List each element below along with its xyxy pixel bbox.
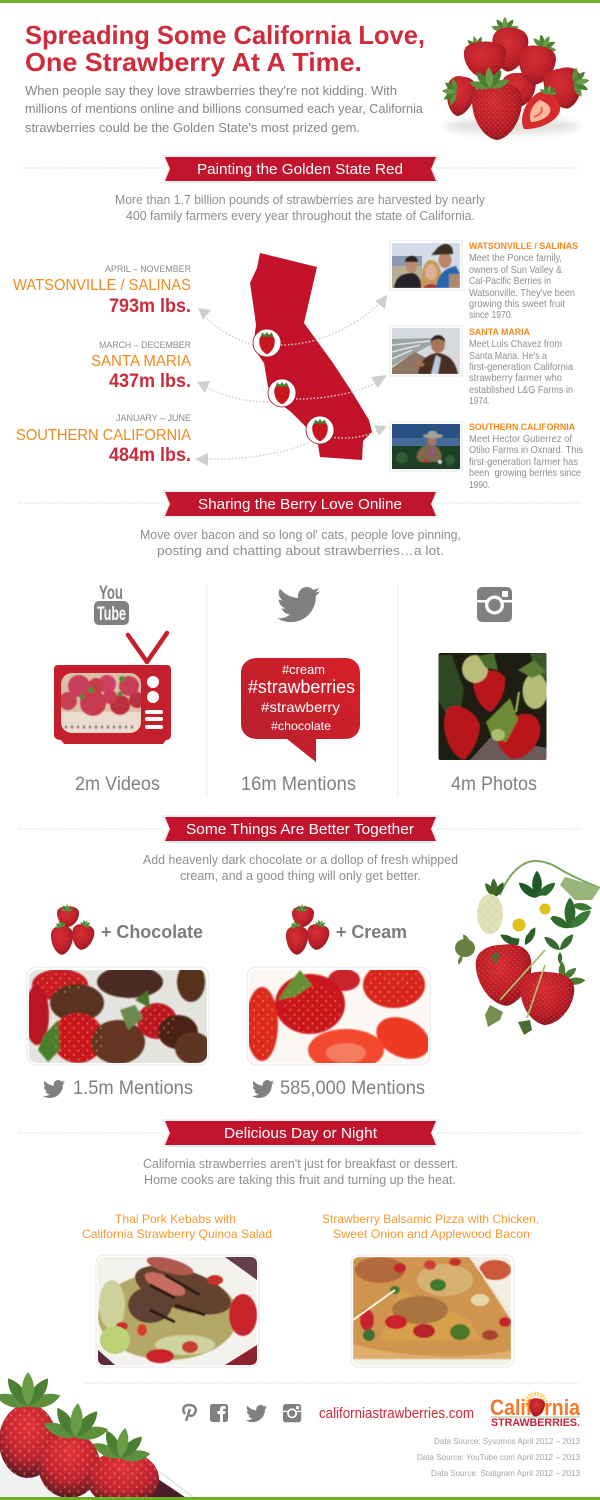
icon: YouTube: You [99, 583, 123, 604]
section 3 intro [143, 853, 458, 883]
left label: Watsonville / Salinas [13, 264, 191, 317]
section 4 intro: Home cooks are taking this fruit and turning up the heat. [144, 1173, 456, 1187]
recipe title: pizza [322, 1212, 539, 1241]
section 1 intro [115, 193, 486, 223]
pairing: cream heading [286, 904, 407, 955]
farmer text: Santa Maria: 1974. [469, 395, 490, 407]
section divider 1 [19, 167, 582, 169]
intro text: When people say they love strawberries they're not kidding. With [25, 83, 397, 98]
TV with strawberries [54, 633, 171, 744]
icon: YouTube: Tube [97, 604, 126, 625]
section 4 intro: California strawberries aren't just for breakfast or dessert. [143, 1157, 458, 1171]
icon: Twitter bird [277, 587, 320, 622]
left label: Southern California [16, 413, 191, 466]
section 1 intro: More than 1.7 billion pounds of strawberries are harvested by nearly [115, 193, 486, 207]
left label: Southern California: JANUARY – JUNE [116, 413, 191, 424]
icon: Instagram [477, 587, 512, 622]
farmer text: Southern California: Meet Hector Gutierrez of [469, 433, 572, 445]
left label: Southern California: 484m lbs. [109, 445, 191, 466]
farmer text: Santa Maria: Santa Maria. He's a [469, 350, 547, 362]
farmer text: Watsonville: WATSONVILLE / SALINAS [469, 241, 578, 252]
bottom green bar [0, 1497, 600, 1500]
section 3 intro: Add heavenly dark chocolate or a dollop of fresh whipped [143, 853, 458, 867]
icon: Pinterest [183, 1405, 196, 1421]
farmer text: Southern California: SOUTHERN CALIFORNIA [469, 422, 575, 433]
logo: California Strawberries: STRAWBERRIES. [491, 1417, 580, 1429]
banner: Delicious Day or Night: Delicious Day or Night [224, 1126, 377, 1142]
banner: Sharing the Berry Love Online [162, 490, 439, 518]
farmer text: Southern California: 1990. [469, 479, 490, 491]
data sources: Data Source: Sysomos April 2012 – 2013 [434, 1436, 580, 1446]
recipe title: pizza: Strawberry Balsamic Pizza with Chicken, [322, 1212, 539, 1226]
hero strawberries photo [441, 17, 592, 140]
banner: Some Things Are Better Together [162, 815, 439, 843]
speech bubble with hashtags: #chocolate [271, 719, 331, 733]
website url: californiastrawberries.com [319, 1406, 474, 1422]
pairing: chocolate heading: + Chocolate [101, 922, 203, 942]
photo: pizza [351, 1255, 514, 1367]
speech bubble with hashtags [241, 658, 360, 762]
logo: California Strawberries [490, 1394, 581, 1429]
stat: 2m Videos: 2m Videos [75, 774, 160, 795]
photo: strawberries and cream [246, 966, 430, 1066]
farmer text: Santa Maria: strawberry farmer who [469, 372, 562, 384]
intro text [25, 83, 424, 135]
recipe title: kebabs [82, 1212, 272, 1241]
icon: YouTube [94, 583, 129, 625]
stat: 16m Mentions: 16m Mentions [241, 774, 356, 795]
farmer text: Watsonville: Cal-Pacific Berries in [469, 275, 551, 287]
section 3 intro: cream, and a good thing will only get better. [180, 869, 421, 883]
farmer text: Southern California [469, 422, 583, 491]
farmer text: Watsonville: since 1970. [469, 309, 513, 321]
farmer text: Santa Maria: established L&G Farms in [469, 384, 573, 396]
speech bubble with hashtags: #strawberries [248, 677, 355, 697]
farmer text: Watsonville: growing this sweet fruit [469, 298, 565, 310]
arrows from pins to labels [202, 300, 383, 459]
pin: Santa Maria [268, 379, 296, 407]
section 4 intro [143, 1157, 458, 1187]
farmer text: Santa Maria: SANTA MARIA [469, 327, 530, 338]
data sources: Data Source: Statigram April 2012 – 2013 [431, 1468, 580, 1478]
photo: chocolate strawberries [25, 962, 211, 1065]
pin: Watsonville [253, 329, 281, 357]
stat: chocolate mentions: 1.5m Mentions [73, 1078, 193, 1099]
speech bubble with hashtags: #cream [282, 663, 325, 677]
pin: Southern California [306, 416, 334, 444]
farmer text: Watsonville: Meet the Ponce family, [469, 252, 562, 264]
banner: Sharing the Berry Love Online: Sharing the Berry Love Online [198, 497, 402, 513]
pairing: chocolate heading [51, 904, 203, 955]
stat: cream mentions: 585,000 Mentions [280, 1078, 425, 1099]
recipe title: pizza: Sweet Onion and Applewood Bacon [333, 1227, 530, 1241]
data sources [417, 1436, 580, 1478]
section 2 intro: Move over bacon and so long ol' cats, people love pinning, [140, 528, 461, 542]
recipe title: kebabs: California Strawberry Quinoa Salad [82, 1227, 272, 1241]
pairing: cream heading: + Cream [336, 922, 407, 942]
map of California [250, 253, 372, 460]
farmer text: Watsonville: Watsonville. They've been [469, 287, 575, 299]
farmer text: Southern California: been growing berries since [469, 467, 581, 479]
banner: Painting the Golden State Red [162, 155, 439, 183]
farmer text: Southern California: Otilio Farms in Oxnard. This [469, 444, 583, 456]
icon: Twitter [246, 1405, 267, 1422]
title [25, 20, 425, 77]
left label: Santa Maria: SANTA MARIA [91, 353, 191, 370]
farmer text: Watsonville: owners of Sun Valley & [469, 264, 562, 276]
photo: kebab salad [96, 1253, 259, 1367]
section 1 intro: 400 family farmers every year throughout the state of California. [126, 209, 475, 223]
title: One Strawberry At A Time. [25, 47, 362, 77]
column dividers [207, 585, 398, 797]
left label: Santa Maria [91, 340, 191, 392]
left label: Santa Maria: MARCH – DECEMBER [99, 340, 191, 351]
farmer text: Santa Maria: Meet Luis Chavez from [469, 338, 562, 350]
stat: 4m Photos: 4m Photos [451, 774, 537, 795]
section divider 2 [19, 502, 582, 504]
footer divider [85, 1382, 580, 1384]
banner: Delicious Day or Night [162, 1119, 439, 1147]
speech bubble with hashtags: #strawberry [261, 699, 340, 715]
logo: California Strawberries: California [490, 1395, 581, 1420]
recipe title: kebabs: Thai Pork Kebabs with [115, 1212, 236, 1226]
left label: Southern California: SOUTHERN CALIFORNIA [16, 427, 191, 444]
top green bar [0, 0, 600, 3]
farmer text: Santa Maria: first-generation California [469, 361, 573, 373]
photo: Luis Chavez [390, 326, 462, 376]
farmer text: Southern California: first-generation farmer has [469, 456, 578, 468]
icon: Instagram small [283, 1404, 301, 1422]
section 2 intro [140, 528, 461, 558]
left label: Watsonville / Salinas: 793m lbs. [109, 296, 191, 317]
section divider 4 [19, 1132, 582, 1134]
intro text: millions of mentions online and billions consumed each year, California [25, 101, 424, 116]
banner: Some Things Are Better Together: Some Things Are Better Together [186, 822, 414, 838]
left label: Santa Maria: 437m lbs. [109, 371, 191, 392]
arrow heads [195, 295, 387, 466]
title: Spreading Some California Love, [25, 20, 425, 50]
icon: Facebook [210, 1404, 228, 1422]
strawberry plant with flowers [455, 861, 600, 1035]
farmer text: Watsonville [469, 241, 578, 321]
left label: Watsonville / Salinas: WATSONVILLE / SALINAS [13, 277, 191, 294]
section 2 intro: posting and chatting about strawberries…a lot. [157, 544, 444, 558]
section divider 3 [19, 828, 582, 830]
data sources: Data Source: YouTube.com April 2012 – 2013 [417, 1452, 580, 1462]
photo: Ponce family [390, 241, 462, 290]
farmer text: Santa Maria [469, 327, 573, 407]
Instagram strawberry photo [438, 653, 548, 760]
photo: Hector Gutierrez [390, 422, 462, 471]
left label: Watsonville / Salinas: APRIL – NOVEMBER [105, 264, 191, 275]
intro text: strawberries could be the Golden State's most prized gem. [25, 120, 360, 135]
banner: Painting the Golden State Red: Painting the Golden State Red [197, 162, 403, 178]
bottom-left strawberries in a white dish [0, 1372, 193, 1500]
